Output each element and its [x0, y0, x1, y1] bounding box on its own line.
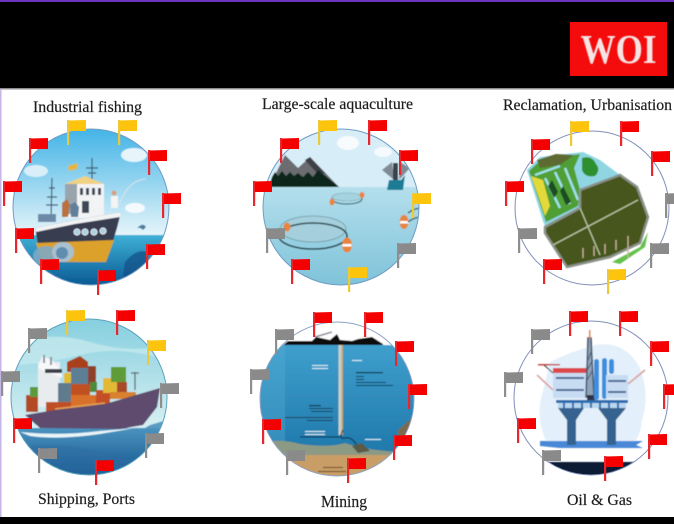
footer band [0, 517, 674, 524]
heading: shipping, ports: Shipping, Ports [38, 491, 135, 508]
panel: reclamation, urbanisation [503, 97, 674, 294]
boundary circle [260, 322, 414, 476]
heading: mining: Mining [321, 492, 367, 511]
boundary circle [263, 129, 419, 285]
boundary circle [13, 129, 169, 285]
illustration: fish pens [263, 129, 420, 285]
logo: WOI: WOI [580, 26, 656, 72]
illustration: deep-sea mining cross-section [260, 322, 415, 477]
boundary circle [11, 319, 167, 475]
panel: oil & gas [504, 311, 674, 509]
flags: oil & gas [504, 311, 674, 481]
panel: shipping, ports [1, 310, 179, 508]
panel: large-scale aquaculture [253, 96, 431, 292]
header band [0, 0, 674, 90]
flags: industrial fishing [3, 120, 181, 295]
heading: large-scale aquaculture: Large-scale aquaculture [262, 96, 413, 113]
heading: oil & gas: Oil & Gas [567, 492, 632, 509]
panel: industrial fishing [3, 99, 181, 295]
heading: reclamation, urbanisation: Reclamation, Urbanisation [503, 97, 672, 114]
left edge strip [0, 89, 2, 517]
heading: industrial fishing: Industrial fishing [33, 99, 142, 116]
flags: reclamation, urbanisation [505, 121, 674, 294]
boundary circle [515, 131, 669, 285]
panel: mining [250, 312, 427, 511]
flags: large-scale aquaculture [253, 120, 431, 292]
illustration: offshore oil platform [536, 329, 646, 474]
illustration: reclaimed land map [527, 152, 648, 267]
flags: shipping, ports [1, 310, 179, 485]
illustration: container ship [11, 319, 167, 475]
illustration: fishing boat [13, 129, 169, 285]
boundary circle [514, 321, 668, 475]
flags: mining [250, 312, 427, 483]
